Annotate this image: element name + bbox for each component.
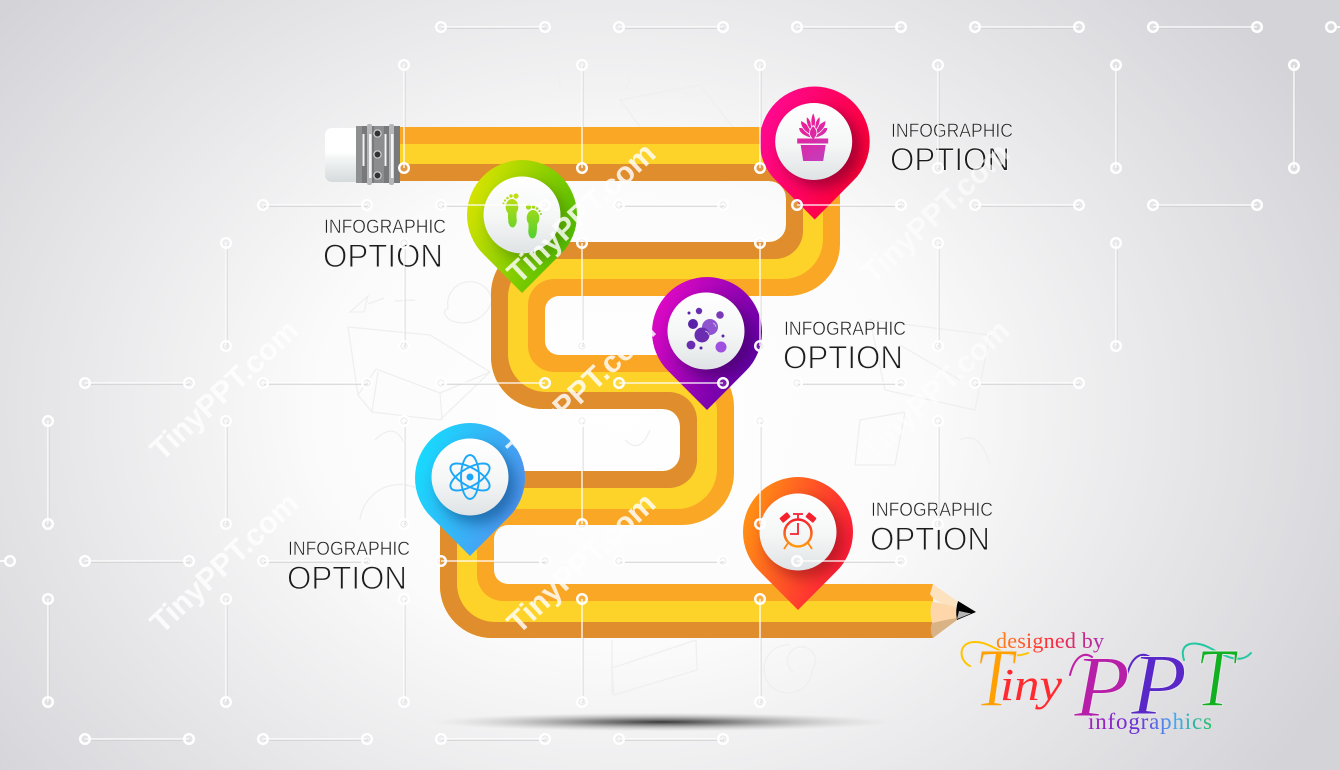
watermarks bbox=[144, 136, 1016, 640]
label: plant option: OPTION bbox=[890, 142, 1010, 178]
band: yellow bbox=[400, 144, 933, 638]
label: atom option: INFOGRAPHIC bbox=[288, 538, 410, 560]
watermarks: TinyPPT.com bbox=[144, 486, 305, 640]
logo flourishes bbox=[962, 642, 1251, 675]
label: footprints option: OPTION bbox=[323, 238, 443, 274]
label: clock option: INFOGRAPHIC bbox=[871, 499, 993, 521]
logo: designed by TinyPPT infographics: infographics bbox=[1088, 709, 1212, 734]
icon: bubbles bbox=[687, 308, 726, 352]
label: plant option bbox=[890, 120, 1013, 178]
label: bubbles option: OPTION bbox=[783, 340, 903, 376]
eraser bbox=[325, 128, 358, 182]
watermarks: TinyPPT.com bbox=[501, 486, 662, 640]
logo: designed by TinyPPT infographics: P bbox=[1130, 637, 1187, 734]
pencil eraser and ferrule bbox=[325, 124, 400, 185]
logo: designed by TinyPPT infographics: P bbox=[1073, 639, 1130, 736]
label: bubbles option: INFOGRAPHIC bbox=[784, 318, 906, 340]
pin 5: alarm clock bbox=[743, 477, 853, 610]
icon: potted plant bbox=[797, 112, 828, 161]
label: footprints option bbox=[323, 216, 446, 274]
label: plant option: INFOGRAPHIC bbox=[891, 120, 1013, 142]
watermarks: TinyPPT.com bbox=[501, 313, 662, 467]
pin 3: bubbles bbox=[652, 277, 762, 410]
background doodles bbox=[348, 35, 990, 695]
icon: alarm clock bbox=[779, 512, 817, 549]
watermarks: TinyPPT.com bbox=[501, 136, 662, 290]
band: dark orange bbox=[400, 164, 933, 638]
band: orange bbox=[400, 127, 933, 638]
logo: designed by TinyPPT infographics: iny bbox=[1000, 659, 1063, 710]
pin 1: plant bbox=[760, 87, 870, 220]
label: footprints option: INFOGRAPHIC bbox=[324, 216, 446, 238]
pin 4: atom bbox=[415, 423, 525, 556]
label: clock option: OPTION bbox=[870, 521, 990, 557]
logo: designed by TinyPPT infographics: T bbox=[1196, 632, 1238, 725]
logo: designed by TinyPPT infographics bbox=[962, 628, 1251, 736]
pencil tip bbox=[930, 584, 976, 638]
watermarks: TinyPPT.com bbox=[855, 313, 1016, 467]
ferrule bbox=[356, 124, 400, 185]
watermarks: TinyPPT.com bbox=[144, 313, 305, 467]
pin 2: footprints bbox=[467, 160, 577, 293]
label: atom option: OPTION bbox=[287, 560, 407, 596]
label: atom option bbox=[287, 538, 410, 596]
watermarks: TinyPPT.com bbox=[855, 136, 1016, 290]
label: clock option bbox=[870, 499, 993, 557]
ground shadow bbox=[430, 712, 894, 732]
logo: designed by TinyPPT infographics: designed by bbox=[996, 628, 1104, 653]
label: bubbles option bbox=[783, 318, 906, 376]
icon: footprints bbox=[502, 193, 542, 238]
pencil body bbox=[400, 127, 933, 638]
logo: designed by TinyPPT infographics: T bbox=[975, 632, 1017, 725]
icon: atom bbox=[446, 455, 494, 499]
